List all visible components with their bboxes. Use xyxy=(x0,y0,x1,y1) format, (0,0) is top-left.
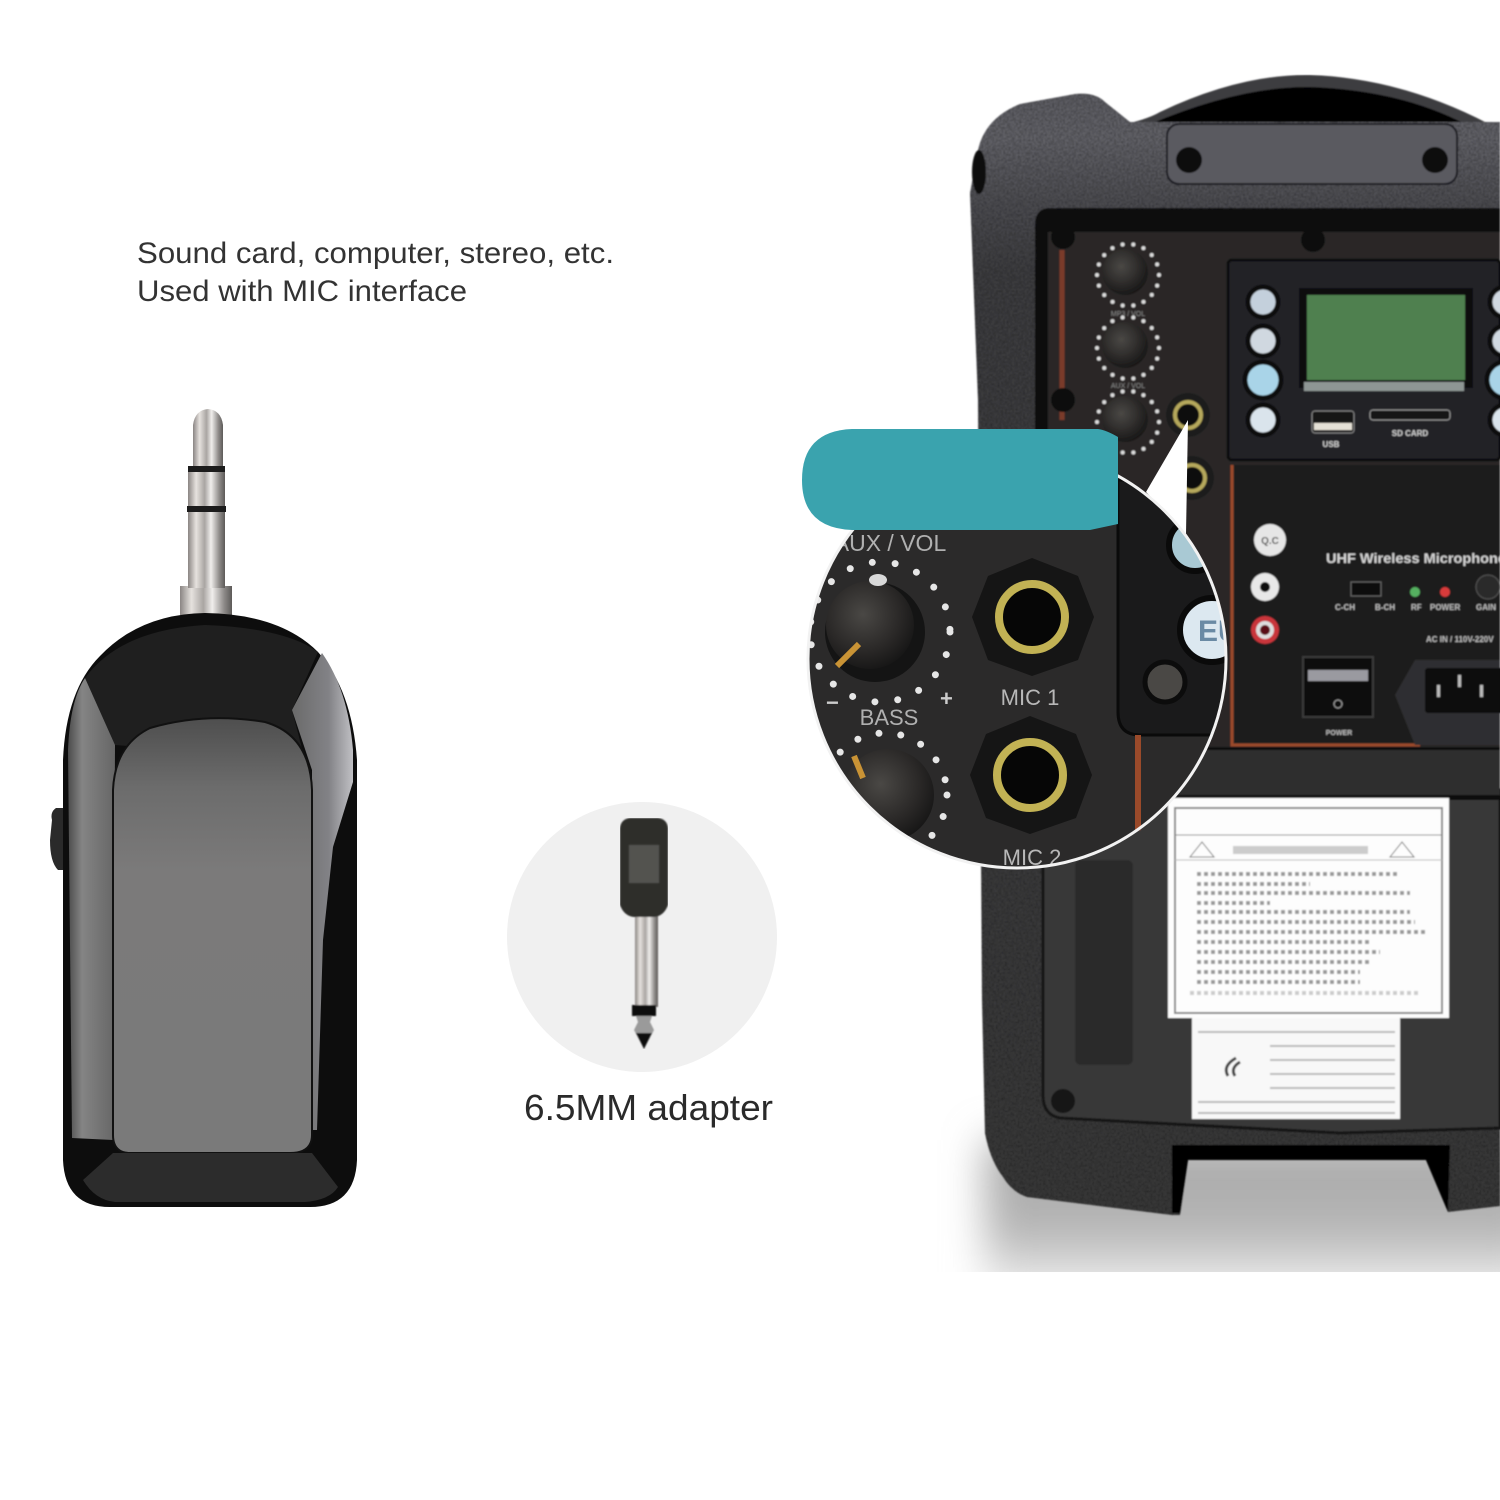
zoomed EU button xyxy=(1177,595,1224,665)
device: wireless receiver xyxy=(50,409,357,1207)
MIC 1 jack xyxy=(972,558,1094,676)
knob: AUX VOL: AUX / VOL xyxy=(1111,383,1145,390)
MIC 1 label: MIC 1 xyxy=(1001,685,1059,710)
AC socket xyxy=(1395,660,1500,745)
cabinet xyxy=(970,94,1500,1215)
minus and plus: − xyxy=(826,690,839,715)
knob: MP3 VOL xyxy=(1097,244,1159,318)
infographic canvas xyxy=(50,74,1500,1272)
orange trim lines xyxy=(1062,250,1420,830)
zoomed QC button xyxy=(1166,524,1205,574)
RF led xyxy=(1410,587,1420,597)
RCA red xyxy=(1251,616,1279,644)
minus and plus xyxy=(826,692,952,704)
module labels: AC IN / 110V-220V xyxy=(1426,635,1494,644)
corner screw xyxy=(1051,1089,1075,1113)
module labels: GAIN xyxy=(1476,603,1496,612)
side button xyxy=(50,808,66,870)
power switch xyxy=(1303,657,1373,737)
zoomed EU button: EU xyxy=(1198,615,1240,648)
foot slot xyxy=(1172,1145,1450,1213)
media module xyxy=(1228,260,1500,460)
control panel plate xyxy=(1048,232,1500,747)
certification label xyxy=(1192,1018,1400,1119)
center face xyxy=(113,718,312,1153)
SD slot xyxy=(1370,410,1450,420)
carrying handle xyxy=(1130,75,1487,123)
mount screws xyxy=(1176,147,1448,173)
minus and plus: + xyxy=(940,686,953,711)
lens rim xyxy=(808,450,1226,868)
teal label pill xyxy=(802,429,1118,530)
USB port xyxy=(1312,411,1354,433)
module labels: RF xyxy=(1411,603,1422,612)
bass knob xyxy=(836,730,950,839)
QC button xyxy=(1254,524,1286,556)
SD label: SD CARD xyxy=(1392,429,1428,438)
LCD screen xyxy=(1299,288,1473,388)
handle mount plate xyxy=(1167,124,1457,184)
control panel recess xyxy=(1035,208,1500,800)
adapter badge xyxy=(507,802,777,1072)
6.5mm adapter plug xyxy=(620,818,668,1049)
gain knob xyxy=(1476,575,1500,599)
lower recess xyxy=(1043,790,1500,1133)
mic jacks xyxy=(1166,393,1214,500)
cabinet texture xyxy=(960,90,1500,1220)
panel screws xyxy=(1051,225,1325,486)
module labels: C-CH xyxy=(1335,603,1355,612)
power switch: POWER xyxy=(1326,730,1352,737)
knob: bass xyxy=(1097,391,1159,453)
lens content xyxy=(810,478,1224,866)
magnifier callout xyxy=(800,420,1244,880)
MIC 2 label: MIC 2 xyxy=(1003,845,1061,870)
knob: MP3 VOL: MP3 / VOL xyxy=(1111,311,1145,318)
3.5mm plug xyxy=(180,409,232,615)
wireless module background xyxy=(1234,465,1500,743)
USB label: USB xyxy=(1323,440,1340,449)
top facet xyxy=(85,625,318,760)
right strip xyxy=(292,653,353,1130)
zoomed trim xyxy=(1135,735,1141,830)
media buttons left xyxy=(1245,287,1281,435)
zoomed plate xyxy=(1116,478,1224,736)
band below panel xyxy=(1040,750,1500,795)
module labels: B-CH xyxy=(1375,603,1395,612)
caption: usage text xyxy=(137,237,614,308)
speaker xyxy=(960,75,1500,1220)
zoomed screw xyxy=(1145,662,1185,702)
RCA white xyxy=(1251,573,1279,601)
power led xyxy=(1440,587,1450,597)
BASS label: BASS xyxy=(860,705,918,730)
media buttons right xyxy=(1487,287,1500,435)
MIC 2 jack xyxy=(970,716,1092,834)
side slot xyxy=(1075,860,1133,1065)
floor shadow xyxy=(985,1140,1500,1300)
left strip xyxy=(68,678,115,1140)
side grip notch xyxy=(972,150,986,194)
warning label xyxy=(1168,798,1449,1018)
caption: usage text: Used with MIC interface xyxy=(137,275,467,308)
module title: UHF Wireless Microphone xyxy=(1326,550,1500,566)
module labels xyxy=(1335,603,1496,644)
caption: usage text: Sound card, computer, stereo, etc. xyxy=(137,237,614,270)
QC button: Q.C xyxy=(1261,536,1279,547)
knob: AUX VOL xyxy=(1097,317,1159,390)
switch xyxy=(1351,582,1381,596)
receiver body xyxy=(63,613,357,1207)
AUX/VOL label: AUX / VOL xyxy=(834,530,946,556)
bottom facet xyxy=(83,1153,338,1202)
pointer wedge xyxy=(1146,420,1188,534)
caption: adapter: 6.5MM adapter xyxy=(524,1087,773,1128)
module labels: POWER xyxy=(1430,603,1460,612)
AUX knob xyxy=(810,562,950,702)
